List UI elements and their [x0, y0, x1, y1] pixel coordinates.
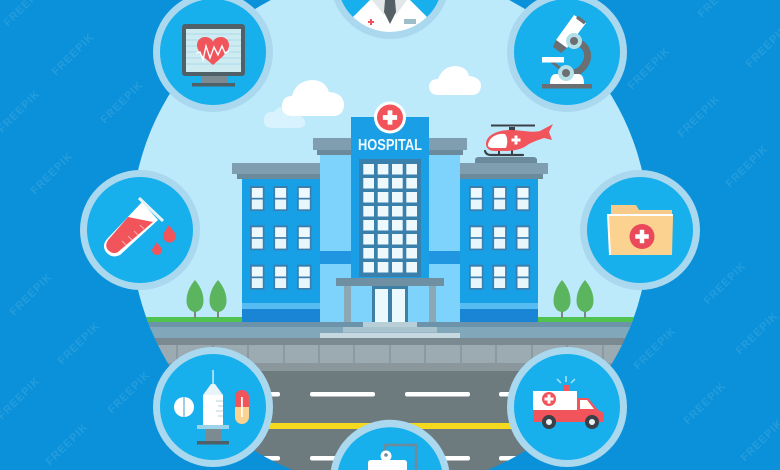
grass [120, 317, 660, 323]
watermarks: FREEPIK [682, 380, 729, 427]
sky [120, 0, 660, 330]
entrance steps [320, 322, 460, 338]
scene: hospital backdrop circle [120, 0, 660, 470]
entrance [336, 278, 444, 322]
road [254, 371, 526, 470]
watermarks: FREEPIK [99, 79, 146, 126]
watermarks: FREEPIK [44, 421, 91, 468]
icon circle: IV drip bag [331, 420, 449, 470]
watermarks: FREEPIK [626, 45, 673, 92]
cloud: small left [264, 107, 305, 128]
hospital building [232, 102, 548, 338]
watermarks: FREEPIK [702, 260, 749, 307]
heading: hospital sign: HOSPITAL [358, 137, 422, 154]
icon circle: medical folder [580, 170, 700, 290]
icon: helicopter [475, 124, 553, 163]
central tower [351, 117, 429, 279]
watermarks: FREEPIK [676, 93, 723, 140]
watermarks: FREEPIK [56, 320, 103, 367]
watermarks: FREEPIK [50, 31, 97, 78]
icon circle: heart monitor [153, 0, 273, 112]
icon circle: doctor [330, 0, 450, 40]
icon circle: ambulance [507, 347, 627, 467]
trees [186, 280, 594, 318]
icon circle: microscope [507, 0, 627, 112]
cloud: large [282, 80, 344, 116]
icon circle: blood test tube [80, 170, 200, 290]
sidewalk [148, 322, 632, 371]
watermarks: FREEPIK [8, 271, 55, 318]
watermarks: FREEPIK [724, 143, 771, 190]
watermarks: FREEPIK [632, 325, 679, 372]
watermarks: FREEPIK [734, 310, 780, 357]
right wing [460, 163, 548, 322]
icon circle: medicine and syringe [153, 347, 273, 467]
middle section [313, 138, 467, 322]
icon: hospital red cross badge [374, 102, 406, 134]
cloud: right [429, 66, 481, 95]
watermarks: FREEPIK [106, 369, 153, 416]
watermarks: FREEPIK [29, 150, 76, 197]
left wing [232, 163, 320, 322]
